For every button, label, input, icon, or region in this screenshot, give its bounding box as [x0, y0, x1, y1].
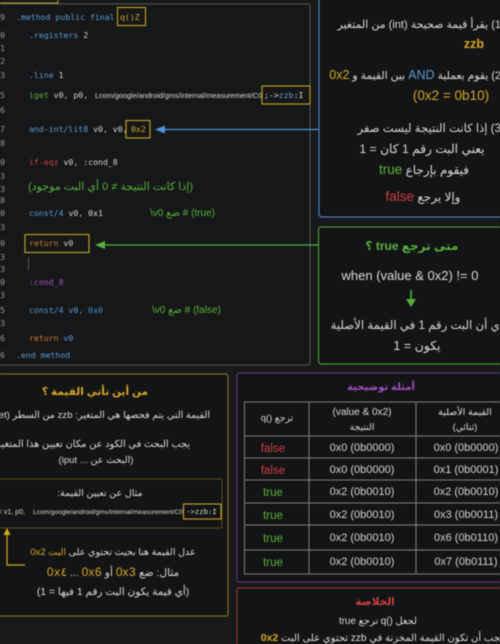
- highlight: 0x2: [126, 120, 150, 138]
- table rows: 0x2 (0b0010): [330, 556, 394, 568]
- line numbers: 0: [0, 209, 5, 218]
- highlight: 0x2: 0x2: [131, 124, 146, 134]
- note: عدل القيمة هنا بحيث تحتوي على البت 0x2: [30, 547, 196, 558]
- table rows: 0x0 (0b0000): [330, 464, 394, 476]
- step 1: 1) يقرأ قيمة صحيحة (int) من المتغير: [337, 17, 500, 31]
- code: return v0: return v0: [29, 333, 73, 343]
- line numbers: 3: [0, 291, 5, 300]
- panel: conclusion: يجب أن تكون القيمة المخزنة في zzb تحتوي على البت 0x2: [261, 631, 500, 644]
- panel: where value comes from: مثال: ضع 0x3 أو 0x6‏ ... ‏0x٤: [47, 565, 179, 579]
- panel: blue explanation: (0x2 = 0b10): [413, 88, 489, 103]
- example box: مثال عن تعيين القيمة:: [57, 488, 143, 499]
- panel: code: [0, 0, 319, 365]
- highlight: return v0: return v0: [29, 238, 73, 248]
- panel: blue explanation: فيقوم بإرجاع true: [379, 162, 469, 178]
- line numbers: 3: [0, 223, 5, 232]
- code: const true: const/4 v0, 0x1: [29, 208, 103, 218]
- panel: blue explanation: [319, 0, 500, 217]
- code: class path: Lcom/google/android/gms/internal/measurement/C0: [95, 91, 262, 100]
- highlight: zzb field: [262, 86, 310, 104]
- code: iget: iget v0, p0,: [29, 90, 88, 100]
- line numbers: [0, 13, 5, 360]
- panel: blue explanation: وإلا يرجع false: [386, 189, 460, 205]
- panel: conclusion: [237, 588, 500, 644]
- table rows: 0x2 (0b0010): [330, 486, 394, 498]
- line numbers: 3: [0, 185, 5, 194]
- comment: false: \v0 ضع # (false): [152, 305, 221, 316]
- highlight: zzb field: ;->zzb:I: [264, 90, 304, 100]
- highlight: q()Z: [118, 8, 146, 26]
- panel: when true: [318, 227, 500, 364]
- table rows: 0x2 (0b0010): [330, 532, 394, 544]
- table rows: 0x7 (0b0111): [434, 556, 498, 568]
- code: and-int: and-int/lit8 v0, v0,: [29, 124, 128, 134]
- line numbers: 3: [0, 71, 5, 80]
- example box: t v1, p0,: [0, 509, 25, 516]
- line numbers: 6: [0, 351, 5, 360]
- line numbers: 3: [0, 265, 5, 274]
- table rows: 0x1 (0b0001): [434, 464, 498, 476]
- step 3: 3) إذا كانت النتيجة ليست صفر: [356, 122, 500, 136]
- table rows: 0x6 (0b0110): [434, 532, 498, 544]
- line numbers: 3: [0, 319, 5, 328]
- code: if-eqz: if-eqz v0, :cond_8: [29, 157, 118, 167]
- heading: من أين تأتي القيمة ؟: [42, 384, 148, 398]
- table rows: false: [261, 465, 285, 477]
- table rows: 0x0 (0b0000): [330, 442, 394, 454]
- line numbers: 3: [0, 253, 5, 262]
- line numbers: 2: [0, 57, 5, 66]
- line numbers: 9: [0, 13, 5, 22]
- heading: أمثلة توضيحية: [347, 380, 415, 393]
- example box: Lcom/google/android/gms/internal/measurement/C0: [33, 509, 183, 516]
- line numbers: 1: [0, 44, 5, 53]
- table grid: [244, 402, 500, 574]
- table header: (value & 0x2): [333, 407, 391, 418]
- arrow: blue to 0x2: [155, 126, 319, 134]
- arrow: down: [406, 290, 416, 307]
- code: registers: .registers 2: [29, 30, 88, 40]
- line numbers: 0: [0, 278, 5, 287]
- text: لجعل ()q ترجع true: [339, 616, 417, 627]
- highlight: return v0: [25, 234, 89, 252]
- arrow: green to return: [95, 241, 318, 249]
- line numbers: 8: [0, 196, 5, 205]
- code: method header: .method public final: [16, 12, 115, 22]
- heading: متى ترجع true ؟: [366, 239, 458, 253]
- line numbers: 8: [0, 139, 5, 148]
- table header: ترجع ()q: [261, 413, 294, 423]
- condition: when (value & 0x2) != 0: [341, 268, 478, 283]
- table header: النتيجة: [350, 422, 374, 432]
- table rows: false: [261, 443, 285, 455]
- table rows: 0x0 (0b0000): [434, 442, 498, 454]
- panel: where value comes from: (أي قيمة يكون البت رقم 1 فيها = 1): [37, 584, 189, 598]
- table rows: true: [263, 533, 283, 545]
- line numbers: 6: [0, 334, 5, 343]
- table rows: 0x2 (0b0010): [330, 509, 394, 521]
- panel: where value comes from: يجب البحث في الكود عن مكان تعيين هذا المتغير: [0, 439, 190, 450]
- code: line: .line 1: [29, 70, 64, 80]
- heading: الخلاصة: [355, 596, 395, 608]
- table rows: 0x2 (0b0010): [434, 486, 498, 498]
- panel: where value comes from: (البحث عن ... iput): [59, 455, 133, 466]
- highlight: q()Z: q()Z: [120, 12, 140, 22]
- step 2: 2) يقوم بعملية AND بين القيمة و 0x2: [329, 68, 500, 82]
- table header: القيمة الأصلية: [438, 406, 492, 418]
- line numbers: 6: [0, 106, 5, 115]
- code: cond_8: :cond_8: [29, 277, 64, 287]
- panel: blue explanation: يعني البت رقم 1 كان = 1: [359, 142, 485, 157]
- line numbers: 3: [0, 172, 5, 181]
- meaning: أي أن البت رقم 1 في القيمة الأصلية: [331, 317, 500, 333]
- code: const false: const/4 v0, 0x0: [29, 305, 103, 315]
- panel: blue explanation: zzb: [464, 37, 484, 51]
- table rows: true: [263, 487, 283, 499]
- line numbers: 7: [0, 125, 5, 134]
- panel: when true: يكون = 1: [393, 339, 441, 354]
- table rows: true: [263, 510, 283, 522]
- code: end method: .end method: [16, 350, 70, 360]
- table header: (ثنائي): [453, 422, 477, 432]
- table rows: true: [263, 557, 283, 569]
- example box: ->zzb:I: [186, 507, 217, 516]
- line numbers: 0: [0, 31, 5, 40]
- code: arabic comment: (إذا كانت النتيجة ≠ 0 أي البت موجود): [28, 179, 193, 193]
- example box: [0, 479, 222, 528]
- arrow: yellow up: [4, 528, 25, 565]
- table rows: 0x3 (0b0011): [434, 509, 498, 521]
- line numbers: 0: [0, 158, 5, 167]
- line numbers: 0: [0, 239, 5, 248]
- table header: [261, 406, 492, 432]
- table rows: [261, 442, 498, 569]
- comment: true: \v0 ضع # (true): [150, 208, 215, 219]
- line numbers: 5: [0, 91, 5, 100]
- line numbers: 5: [0, 306, 5, 315]
- panel: where value comes from: [0, 374, 228, 616]
- panel: examples table: [237, 373, 500, 582]
